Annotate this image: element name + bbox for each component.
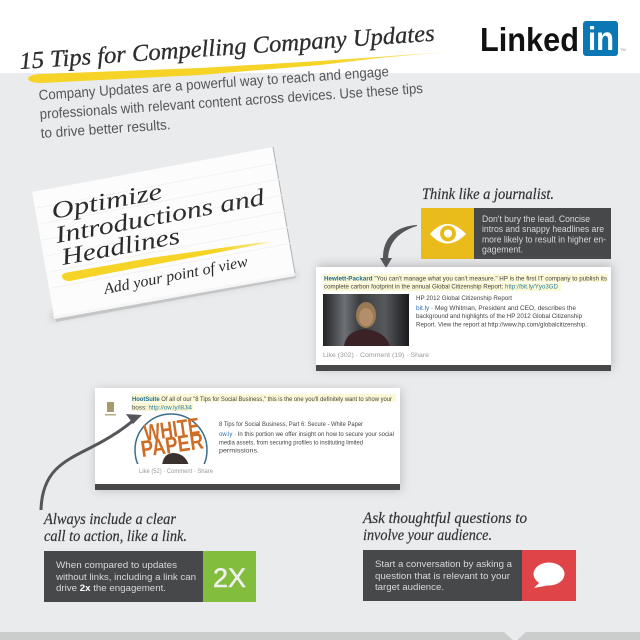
card highlight stroke xyxy=(62,242,272,281)
tip text: When compared to updates xyxy=(56,560,177,570)
card heading xyxy=(49,179,268,271)
card subheading: Add your point of view xyxy=(102,253,250,298)
tip text xyxy=(482,214,606,254)
highlighted post text: boss: http://ow.ly/l8Ji4 xyxy=(132,404,192,412)
intro text: professionals with relevant content across devices. Use these tips xyxy=(39,81,423,123)
HootSuite post screenshot xyxy=(95,388,400,490)
linked article text: 8 Tips for Social Business, Part 6: Secure - White Paper xyxy=(219,421,364,428)
icon: eye xyxy=(430,224,466,244)
tip text: intros and snappy headlines are xyxy=(482,224,604,234)
LinkedIn logo: Linked xyxy=(480,21,579,58)
linked article text: permissions. xyxy=(219,448,259,454)
linked article text: media assets, from securing profiles to instituting limited xyxy=(219,440,363,446)
card heading: Optimize xyxy=(49,179,165,225)
shadow: HP card xyxy=(318,265,612,369)
highlighted post text xyxy=(323,274,608,291)
tip text: gagement. xyxy=(482,244,523,254)
intro text: Company Updates are a powerful way to reach and engage xyxy=(38,64,390,104)
linked article text: background and highlights of the HP 2012 Global Citizenship xyxy=(416,313,582,320)
video thumbnail xyxy=(323,294,409,346)
arrow: tip to HP post xyxy=(380,225,417,268)
HP post screenshot xyxy=(316,267,611,371)
tip text: Start a conversation by asking a xyxy=(375,559,513,569)
index card stack xyxy=(32,147,298,322)
post actions: Like (302) · Comment (19) · Share xyxy=(323,352,429,359)
highlighted post text: Hewlett-Packard "You can't manage what you can't measure." HP is the first IT company to publish its xyxy=(324,276,608,282)
icon: speech bubble xyxy=(534,562,564,588)
tip text: question that is relevant to your xyxy=(375,571,510,581)
heading: call to action: Always include a clear xyxy=(43,511,177,528)
card heading: Introductions and xyxy=(52,184,268,249)
shadow: HootSuite card xyxy=(96,390,401,490)
white paper badge: PAPER xyxy=(139,427,205,462)
bottom band xyxy=(0,632,640,640)
questions tip panel xyxy=(363,550,576,601)
title highlight stroke xyxy=(28,52,447,83)
tip text: more likely to result in higher en- xyxy=(482,234,606,244)
stat: 2X: 2X xyxy=(213,563,246,593)
tip text: without links, including a link can xyxy=(55,572,196,582)
heading: thoughtful questions: Ask thoughtful questions to xyxy=(362,510,527,527)
heading: call to action xyxy=(43,511,187,545)
linked article text xyxy=(416,295,587,328)
card heading: Headlines xyxy=(58,223,182,271)
intro text: to drive better results. xyxy=(40,117,171,142)
tip text: drive 2x the engagement. xyxy=(56,583,166,593)
tip text xyxy=(55,560,196,593)
white paper badge: WHITE xyxy=(142,412,201,446)
post actions: Like (52) · Comment · Share xyxy=(139,469,214,475)
logo thumbnail xyxy=(105,402,116,416)
tip text: target audience. xyxy=(375,582,444,592)
intro text xyxy=(38,64,423,142)
linked article text xyxy=(219,421,394,454)
LinkedIn logo: TM xyxy=(620,47,626,52)
LinkedIn logo: in xyxy=(588,20,614,57)
highlighted post text xyxy=(131,394,396,412)
arrow: link tip to HootSuite post xyxy=(41,414,142,510)
heading: thoughtful questions xyxy=(362,510,527,544)
title: 15 Tips for Compelling Company Updates xyxy=(19,21,435,75)
highlighted post text: HootSuite Of all of our "8 Tips for Social Business," this is the one you'll definitely want to show your xyxy=(132,396,393,403)
journalist tip panel xyxy=(421,208,611,259)
linked article text: bit.ly · Meg Whitman, President and CEO, describes the xyxy=(416,305,576,312)
linked article text: Report. View the report at http://www.hp.com/globalcitizenship. xyxy=(416,322,587,328)
heading: thoughtful questions: involve your audience. xyxy=(363,527,492,544)
white paper badge xyxy=(134,413,208,464)
call to action tip panel xyxy=(44,551,256,602)
highlighted post text: complete carbon footprint in the annual Global Citizenship Report: http://bit.ly/Yyo3GD xyxy=(324,284,558,290)
linked article text: ow.ly · In this portion we offer insight on how to secure your social xyxy=(219,431,394,438)
linked article text: HP 2012 Global Citizenship Report xyxy=(416,295,512,302)
heading: call to action: call to action, like a link. xyxy=(44,528,187,545)
heading: think like a journalist: Think like a journalist. xyxy=(422,186,554,203)
tip text: Don't bury the lead. Concise xyxy=(482,214,590,224)
tip text xyxy=(375,559,513,592)
